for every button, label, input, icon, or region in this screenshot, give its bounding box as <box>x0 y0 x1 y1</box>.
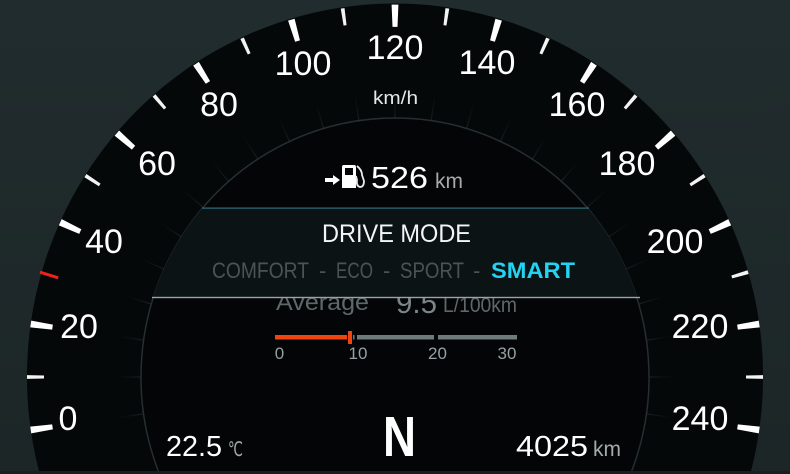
bar gauge scale labels: 20 <box>428 344 447 363</box>
speed scale numbers: 120 <box>367 29 423 67</box>
drive mode options: ECO <box>336 258 373 283</box>
inner dial disk <box>141 118 649 471</box>
speed scale numbers: 200 <box>647 223 703 261</box>
odometer: 4025 <box>516 431 588 463</box>
odometer: km <box>593 438 621 461</box>
compass heading: N <box>383 405 416 469</box>
average fuel economy text partly hidden: L/100km <box>443 294 517 317</box>
drive mode options: SPORT <box>400 258 464 283</box>
drive mode options: - <box>319 258 326 283</box>
speed scale numbers: 0 <box>59 400 77 438</box>
bar gauge scale labels: 30 <box>498 344 516 363</box>
speed scale numbers: 40 <box>85 223 123 261</box>
speed scale numbers <box>59 29 728 438</box>
speed scale numbers: 60 <box>138 145 176 183</box>
inner ring faint radial ticks <box>113 89 677 419</box>
red limit tick at 30 <box>40 271 59 279</box>
bottom edge band <box>0 471 790 474</box>
drive mode options: - <box>473 258 480 283</box>
odometer <box>516 431 621 463</box>
speed scale numbers: 240 <box>672 400 728 438</box>
panel: drive mode <box>152 208 640 298</box>
fuel range value <box>371 160 463 195</box>
average fuel economy text partly hidden <box>276 287 517 320</box>
speed scale numbers: 220 <box>672 308 728 346</box>
icon: fuel pump with arrow <box>325 165 364 188</box>
speed unit label: km/h <box>373 88 418 108</box>
speed scale numbers: 160 <box>549 86 605 124</box>
drive mode options <box>212 258 576 283</box>
average fuel economy text partly hidden: 9.5 <box>396 287 437 320</box>
outside temperature: ℃ <box>228 439 243 461</box>
speed scale numbers: 180 <box>599 145 655 183</box>
fuel range value: km <box>435 170 463 193</box>
drive mode options: - <box>383 258 390 283</box>
speedometer minor ticks <box>27 8 763 379</box>
outside temperature: 22.5 <box>166 431 222 463</box>
average fuel economy text partly hidden: Average <box>276 289 369 315</box>
bar gauge scale labels: 0 <box>275 344 284 363</box>
drive mode heading: DRIVE MODE <box>322 220 471 248</box>
bar gauge scale labels: 10 <box>349 344 367 363</box>
speed scale numbers: 20 <box>60 308 98 346</box>
fuel economy bar gauge <box>275 331 517 363</box>
speed scale numbers: 100 <box>275 45 331 83</box>
drive mode options: COMFORT <box>212 258 309 283</box>
drive mode options: SMART <box>491 258 576 283</box>
speed scale numbers: 80 <box>200 86 238 124</box>
fuel range value: 526 <box>371 160 428 195</box>
speed scale numbers: 140 <box>459 44 515 82</box>
bar gauge scale labels <box>275 344 516 363</box>
